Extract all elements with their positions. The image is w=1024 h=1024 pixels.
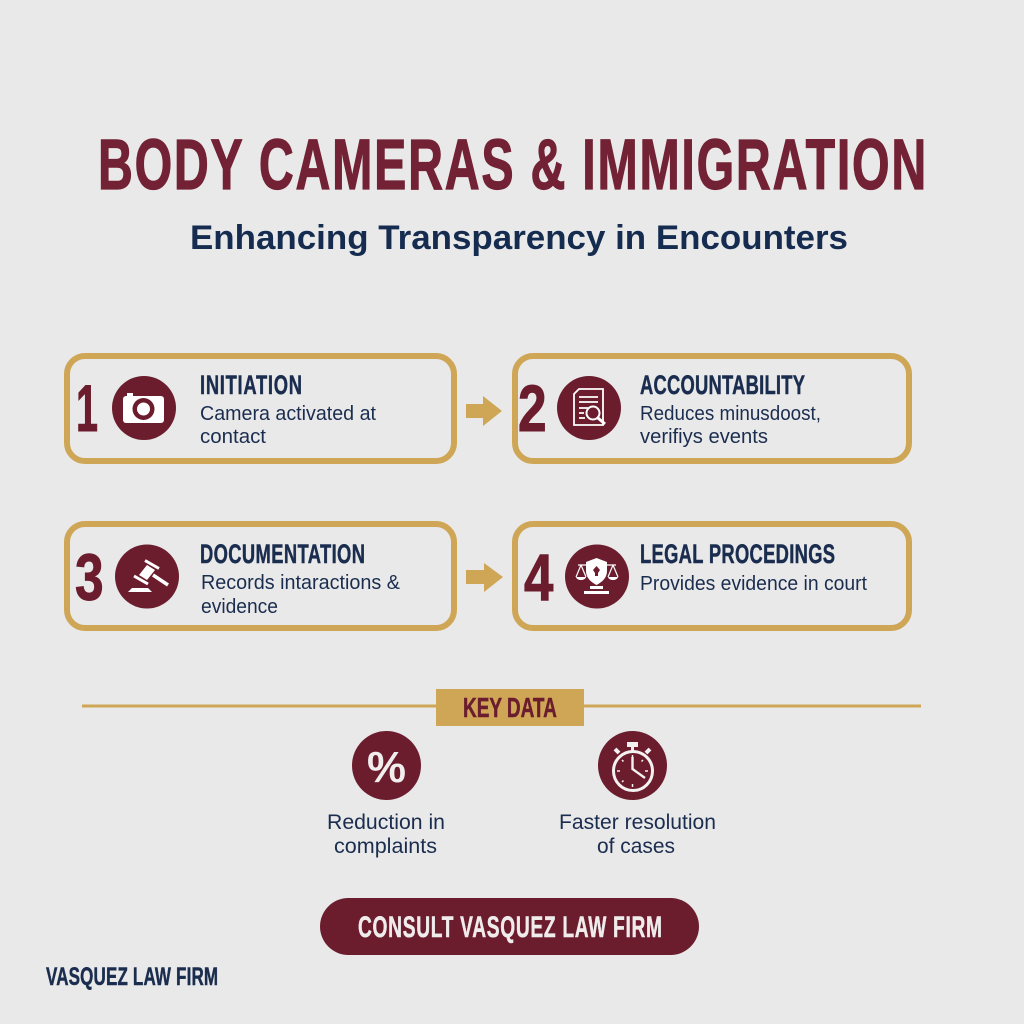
title: BODY CAMERAS & IMMIGRATION <box>98 125 926 204</box>
text: reduction in complaints: complaints <box>334 835 437 858</box>
panel: step 4 legal proceedings <box>515 524 909 628</box>
icon: stopwatch <box>598 731 667 800</box>
heading: initiation: INITIATION <box>200 369 302 400</box>
text: initiation description: contact <box>200 426 266 448</box>
arrow: step 3 to 4 <box>466 563 503 592</box>
text: reduction in complaints: Reduction in <box>327 811 445 834</box>
subtitle: Enhancing Transparency in Encounters <box>190 219 848 257</box>
panel: step 3 documentation <box>67 524 454 628</box>
number 3: 3 <box>75 540 104 614</box>
heading: legal procedings: LEGAL PROCEDINGS <box>640 538 835 569</box>
number 1: 1 <box>76 372 98 446</box>
text: initiation description: Camera activated at <box>200 403 376 425</box>
text: accountability description: Reduces minusdoost, <box>640 403 821 425</box>
heading: accountability: ACCOUNTABILITY <box>640 369 805 400</box>
icon: gavel <box>115 544 179 608</box>
text: documentation description: Records intaractions & <box>201 572 401 594</box>
number 2: 2 <box>518 371 547 445</box>
key data label <box>436 689 584 726</box>
stat: reduction in complaints <box>327 731 445 858</box>
icon: document with magnifier <box>557 376 621 440</box>
footer firm name: VASQUEZ LAW FIRM <box>46 963 218 991</box>
panel: step 1 initiation <box>67 356 454 461</box>
icon: shield and scales <box>565 544 629 608</box>
text: legal description: Provides evidence in court <box>640 573 867 595</box>
call to action button: CONSULT VASQUEZ LAW FIRM <box>358 911 662 944</box>
arrow: step 1 to 2 <box>466 396 502 426</box>
key data label: KEY DATA <box>463 692 557 724</box>
call to action button <box>320 898 699 955</box>
stat: faster resolution <box>559 731 716 858</box>
text: documentation description: evidence <box>201 596 278 618</box>
icon: percent: % <box>367 743 406 792</box>
panel: step 2 accountability <box>515 356 909 461</box>
text: faster resolution of cases: Faster resolution <box>559 811 716 834</box>
heading: documentation: DOCUMENTATION <box>200 538 365 569</box>
text: accountability description: verifiys events <box>640 426 768 448</box>
number 4: 4 <box>524 540 553 614</box>
text: faster resolution of cases: of cases <box>597 835 675 858</box>
icon: camera <box>112 376 176 440</box>
key data divider line <box>82 704 921 708</box>
